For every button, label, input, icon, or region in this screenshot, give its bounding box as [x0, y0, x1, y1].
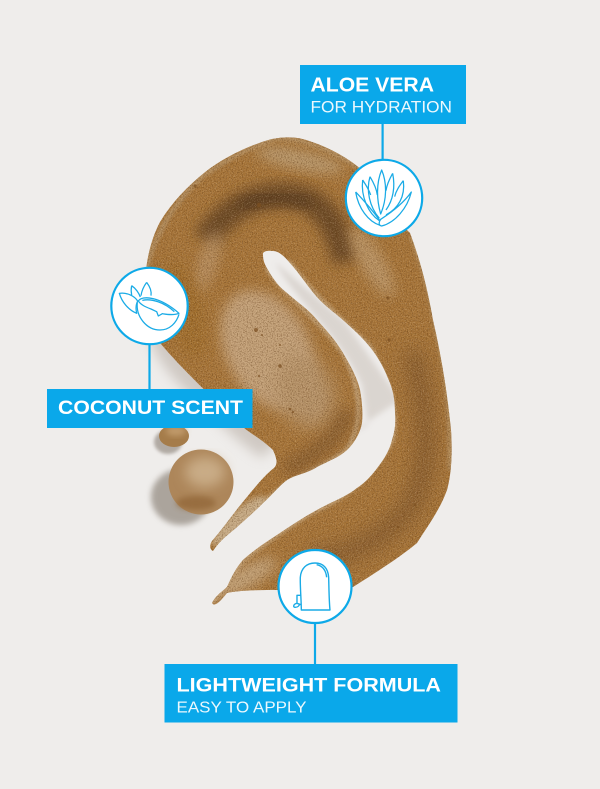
callout: lightweight formula [164, 550, 458, 722]
connector line [148, 344, 151, 389]
light top highlights [254, 141, 346, 179]
translucent rim [212, 263, 394, 603]
pale tails [212, 493, 267, 546]
icon: coconut and leaves [119, 282, 179, 330]
subheading: FOR HYDRATION [310, 98, 452, 116]
icon badge [111, 268, 188, 344]
small droplet [159, 425, 189, 447]
swirl body [145, 137, 452, 604]
connector line [314, 622, 316, 664]
icon: aloe plant [356, 170, 411, 226]
heading: COCONUT SCENT [58, 397, 243, 419]
light central patch [214, 284, 320, 414]
large droplet [168, 450, 234, 514]
warm left band [168, 266, 204, 354]
label box [164, 664, 458, 722]
subheading: EASY TO APPLY [176, 699, 306, 716]
dark upper arc [205, 196, 345, 262]
callout: aloe vera [300, 65, 466, 236]
brown lower band [310, 350, 426, 560]
product shadows [142, 262, 400, 525]
grain [130, 130, 460, 610]
bubbles [193, 184, 416, 528]
icon badge [346, 160, 422, 236]
heading: LIGHTWEIGHT FORMULA [176, 675, 441, 697]
label box [47, 389, 252, 428]
callout: coconut scent [47, 268, 252, 428]
icon: application mitt [294, 563, 330, 610]
label box [300, 65, 466, 124]
darker arc core [240, 197, 310, 207]
infographic canvas [47, 65, 466, 722]
connector line [382, 124, 384, 160]
heading: ALOE VERA [310, 75, 434, 97]
scrub swirl [130, 130, 460, 610]
icon badge [278, 550, 352, 623]
